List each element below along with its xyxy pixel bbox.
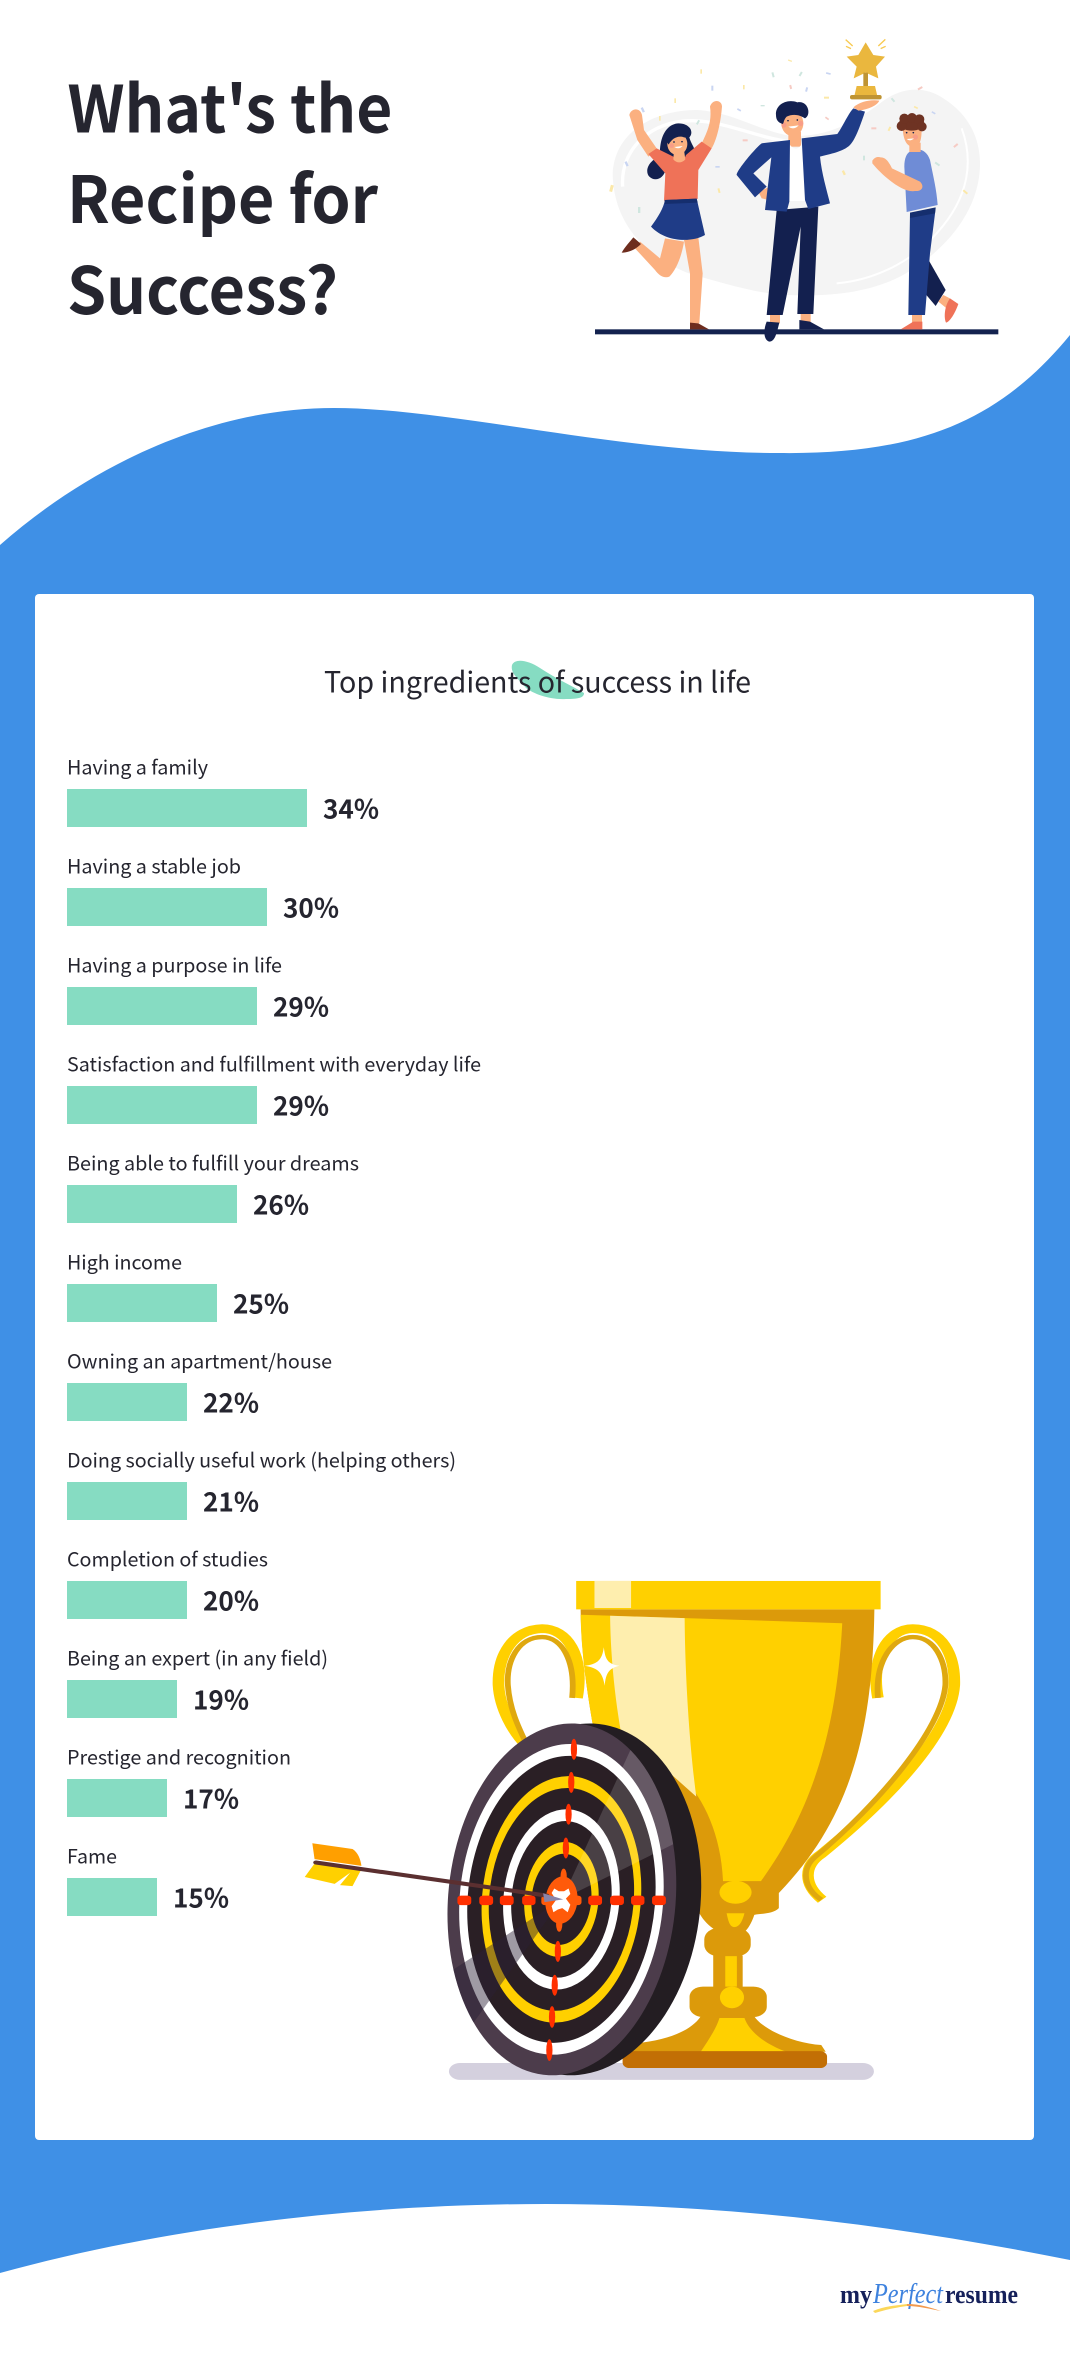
red tick marks [457, 1739, 666, 2061]
row: Satisfaction and fulfillment: 29% [273, 1084, 329, 1124]
row: Having a family: 34% [323, 788, 379, 826]
decorative mint blob behind chart heading [512, 661, 584, 699]
row: Doing socially useful work [67, 1444, 456, 1520]
row: Being able to fulfill your dreams: 26% [253, 1184, 309, 1222]
row: Fame: Fame [67, 1840, 117, 1870]
logo: myPerfectResume: resume [945, 2280, 1018, 2309]
title: Recipe for [67, 148, 379, 242]
row: Having a family [67, 752, 379, 827]
row: Being able to fulfill your dreams: Being able to fulfill your dreams [67, 1148, 359, 1176]
row: Owning an apartment/house: 22% [203, 1382, 259, 1420]
title [67, 58, 392, 333]
row: Being able to fulfill your dreams [67, 1148, 359, 1223]
row: Completion of studies [67, 1544, 268, 1619]
row: Having a purpose in life: Having a purpose in life [67, 950, 282, 978]
logo: myPerfectResume [840, 2279, 1018, 2313]
logo: myPerfectResume: Perfect [872, 2279, 944, 2310]
row: Being an expert: Being an expert (in any field) [67, 1642, 328, 1672]
row: Having a purpose in life [67, 950, 329, 1025]
row: Being an expert: 19% [193, 1678, 249, 1718]
person: man holding trophy [737, 100, 879, 342]
person: woman cheering [622, 101, 722, 329]
trophy held up [846, 39, 886, 99]
row: Prestige and recognition: 17% [183, 1778, 239, 1816]
row: Having a stable job: Having a stable job [67, 850, 241, 880]
row: Prestige and recognition: Prestige and recognition [67, 1742, 291, 1770]
title: What's the [68, 58, 392, 152]
chart heading: Top ingredients of success in life [324, 660, 751, 702]
trophy cup [498, 1581, 954, 2068]
row: Satisfaction and fulfillment [67, 1048, 481, 1124]
panel: chart card [35, 594, 1034, 2140]
row: Fame: 15% [173, 1876, 229, 1916]
person: man clapping [872, 113, 958, 329]
row: Having a purpose in life: 29% [273, 986, 329, 1024]
row: Completion of studies: Completion of studies [67, 1544, 268, 1572]
row: Satisfaction and fulfillment: Satisfaction and fulfillment with everyday life [67, 1048, 481, 1078]
title: Success? [67, 239, 338, 333]
bar chart: top ingredients of success [67, 752, 481, 1916]
illustration: trophy cup and dartboard [305, 1581, 954, 2080]
row: Doing socially useful work: 21% [203, 1480, 259, 1520]
row: Owning an apartment/house: Owning an apartment/house [67, 1346, 332, 1374]
row: Doing socially useful work: Doing socially useful work (helping others) [67, 1444, 456, 1474]
bullseye [544, 1869, 579, 1932]
row: Prestige and recognition [67, 1742, 291, 1817]
row: High income [67, 1246, 289, 1322]
ground shadow [449, 2063, 874, 2080]
row: Being an expert [67, 1642, 328, 1718]
row: Completion of studies: 20% [203, 1580, 259, 1618]
illustration: three people celebrating with trophy [595, 39, 998, 342]
row: High income: 25% [233, 1282, 289, 1322]
arrow [305, 1843, 563, 1902]
confetti [609, 59, 968, 213]
sparkle [585, 1647, 619, 1686]
row: High income: High income [67, 1246, 182, 1276]
floor line [595, 329, 998, 334]
dartboard target [447, 1724, 702, 2076]
row: Owning an apartment/house [67, 1346, 332, 1421]
row: Having a stable job: 30% [283, 886, 339, 926]
row: Having a family: Having a family [67, 752, 208, 780]
row: Fame [67, 1840, 229, 1916]
logo: myPerfectResume: my [840, 2280, 872, 2309]
row: Having a stable job [67, 850, 339, 926]
